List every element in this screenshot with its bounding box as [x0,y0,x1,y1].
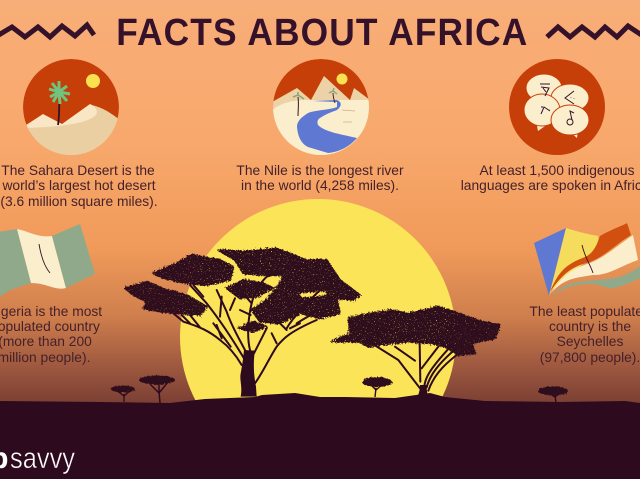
text: Sahara fact: world’s largest hot desert [1,178,156,193]
distant tree 2 [139,376,175,403]
distant tree 4 [538,386,568,403]
right zigzag ornament [547,26,640,37]
sun [180,199,456,475]
text: languages fact [461,163,640,193]
text: Nile fact: in the world (4,258 miles). [241,178,399,193]
left zigzag ornament [0,25,94,37]
text: Sahara fact: (3.6 million square miles). [0,194,158,209]
text: Sahara fact: The Sahara Desert is the [1,163,155,178]
text: Nile fact: The Nile is the longest river [236,163,404,178]
small acacia tree right of centre [332,307,500,399]
text: languages fact: At least 1,500 indigenous [480,163,635,178]
text: Nile fact [236,163,404,193]
distant tree 3 [362,377,392,397]
icon: Seychelles flag [534,223,640,296]
logo: savvy [10,442,75,475]
text: Nigeria fact [0,304,102,365]
icon: speech bubbles [509,59,605,155]
text: Seychelles fact [529,304,640,365]
icon: Sahara desert [20,59,120,160]
text: Sahara fact [0,163,158,209]
text: Seychelles fact: country is the [549,319,631,334]
icon: Nile river [272,59,370,160]
text: Seychelles fact: Seychelles [557,334,623,349]
big acacia tree [125,248,360,397]
title: FACTS ABOUT AFRICA [116,11,527,53]
distant tree 1 [111,386,135,402]
icon: Nigeria flag [0,224,95,298]
ground silhouette [0,393,640,479]
text: Seychelles fact: (97,800 people). [540,350,640,365]
text: Nigeria fact: million people). [0,350,90,365]
text: Nigeria fact: (more than 200 [0,334,92,349]
